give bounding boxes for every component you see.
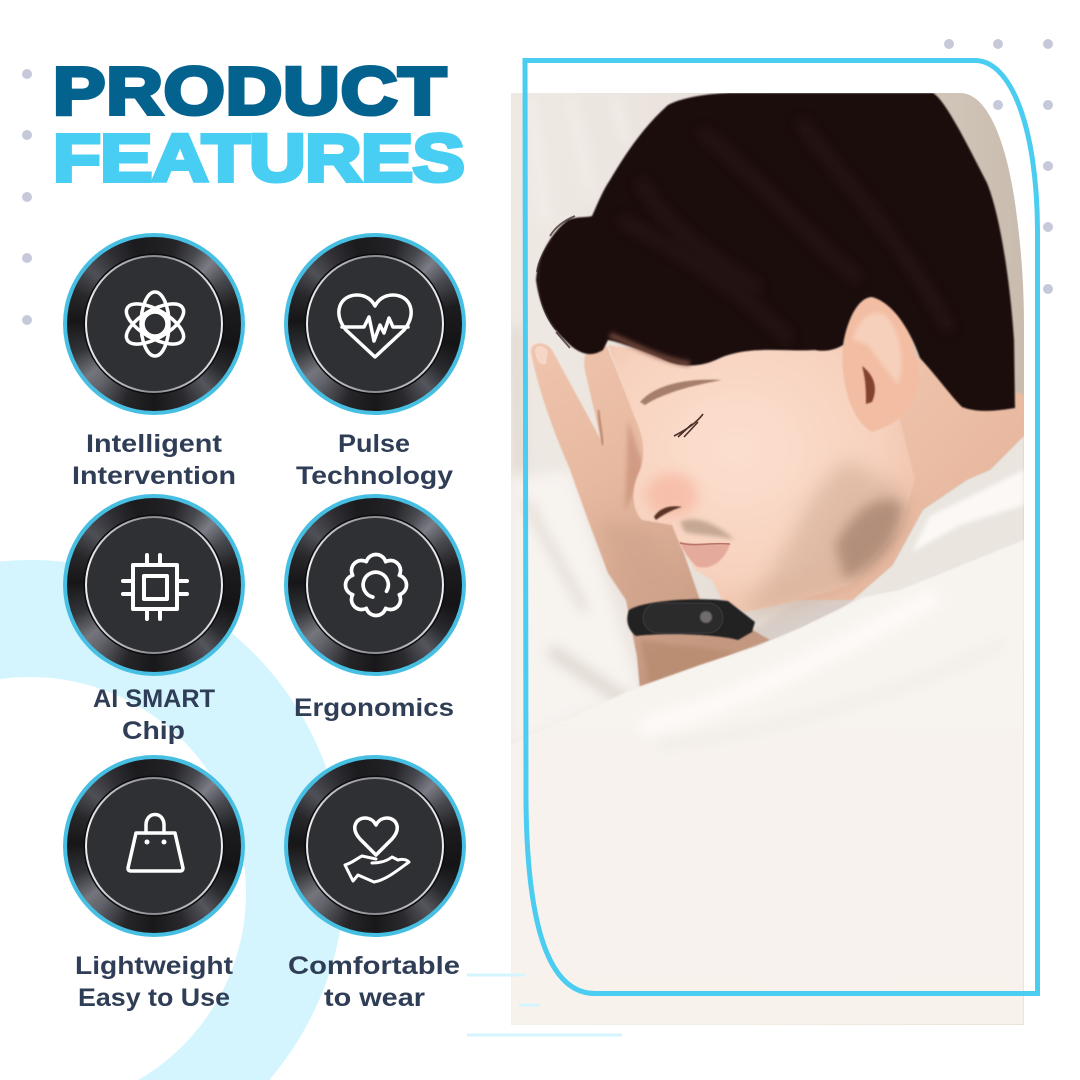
title: PRODUCT xyxy=(53,54,446,129)
hand and forearm xyxy=(531,343,770,690)
feature labels: Easy to Use xyxy=(78,984,230,1012)
shirt xyxy=(846,436,1024,640)
beard xyxy=(745,460,908,612)
feature: Ergonomics icon xyxy=(284,494,466,676)
hair xyxy=(536,93,1015,411)
eye lashes xyxy=(674,414,703,437)
feature labels: Chip xyxy=(122,717,185,745)
feature: Pulse Technology icon xyxy=(284,233,466,415)
ear xyxy=(842,297,918,432)
eyebrow xyxy=(640,380,722,405)
feature labels: Ergonomics xyxy=(294,694,454,722)
feature labels: Comfortable xyxy=(288,952,460,980)
lips xyxy=(678,541,730,568)
photo: man sleeping wearing wristband xyxy=(511,93,1024,1025)
feature labels: Lightweight xyxy=(75,952,234,980)
title: FEATURES xyxy=(53,121,465,196)
feature labels: Technology xyxy=(296,462,453,490)
feature: Intelligent Intervention icon xyxy=(63,233,245,415)
face xyxy=(608,340,915,612)
duvet xyxy=(511,540,1024,1025)
feature: Lightweight Easy to Use icon xyxy=(63,755,245,937)
feature: AI SMART Chip icon xyxy=(63,494,245,676)
feature labels: Intervention xyxy=(72,462,236,490)
feature labels: to wear xyxy=(324,984,425,1012)
wristband xyxy=(627,599,755,640)
feature labels: AI SMART xyxy=(93,685,215,713)
neck xyxy=(800,340,1024,600)
feature: Comfortable to wear icon xyxy=(284,755,466,937)
feature labels: Pulse xyxy=(338,430,410,458)
pillow xyxy=(511,93,1024,1025)
feature labels: Intelligent xyxy=(86,430,223,458)
